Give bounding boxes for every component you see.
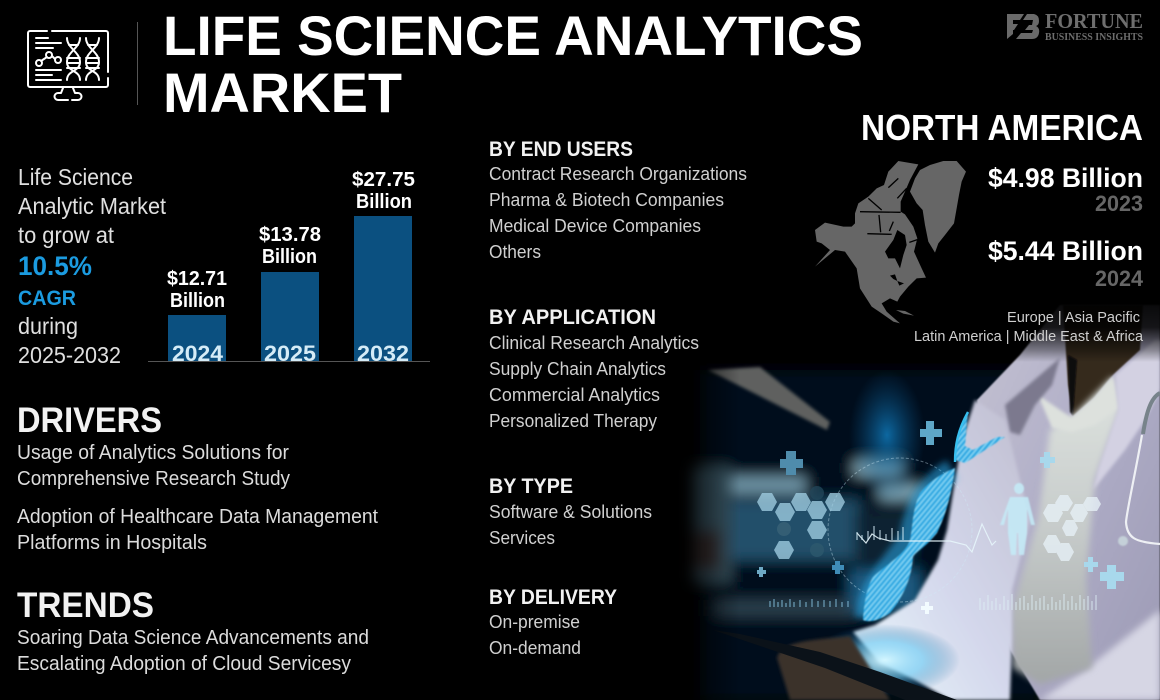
panel: trends: Soaring Data Science Advancements and: [17, 627, 369, 649]
bar chart: Billion: [262, 246, 317, 268]
fade left: [670, 285, 740, 700]
hexagons right: [1043, 495, 1101, 561]
panel: trends: TRENDS: [17, 586, 154, 625]
panel: North America stats: NORTH AMERICA: [861, 107, 1143, 148]
panel: trends: [17, 586, 369, 675]
photo: doctor with holographic DNA: [640, 285, 1160, 700]
plus marks: [757, 421, 1124, 614]
panel: by application: BY APPLICATION: [489, 306, 656, 329]
fade top: [640, 285, 1160, 362]
CAGR summary text: 2025-2032: [18, 342, 121, 368]
lower right coat highlight: [1040, 610, 1160, 700]
logo: Fortune Business Insights: FORTUNE: [1045, 9, 1143, 33]
CAGR summary text: 10.5%: [18, 251, 92, 281]
sleeve: [853, 400, 1030, 700]
panel: by delivery: On-premise: [489, 611, 580, 632]
hand: [777, 636, 890, 700]
panel: by end users: Pharma & Biotech Companies: [489, 189, 724, 210]
pulse line: [857, 524, 996, 552]
right lapel: [1093, 340, 1160, 490]
title: LIFE SCIENCE ANALYTICS: [163, 4, 863, 67]
panel: North America stats: Europe | Asia Pacific: [1007, 309, 1140, 326]
bar chart: 2032: [357, 341, 409, 366]
CAGR summary text: Analytic Market: [18, 193, 167, 219]
panel: North America stats: $5.44 Billion: [988, 236, 1143, 266]
bar chart: 2024: [172, 341, 223, 366]
panel: by delivery: BY DELIVERY: [489, 586, 617, 609]
bar chart: [148, 169, 430, 366]
logo: Fortune Business Insights: [1007, 9, 1143, 43]
panel: drivers: Usage of Analytics Solutions for: [17, 442, 289, 464]
panel: by delivery: [489, 586, 617, 658]
panel: trends: Escalating Adoption of Cloud Servicesy: [17, 653, 351, 675]
panel: drivers: Platforms in Hospitals: [17, 532, 207, 554]
icon: monitor with DNA: [28, 31, 108, 100]
panel: by application: Clinical Research Analytics: [489, 332, 699, 353]
panel: by delivery: On-demand: [489, 637, 581, 658]
tablet: [713, 630, 957, 700]
panel: North America stats: 2023: [1095, 191, 1143, 216]
panel: by type: BY TYPE: [489, 475, 573, 498]
panel: drivers: Comprehensive Research Study: [17, 468, 290, 490]
neck: [1063, 305, 1143, 416]
DNA ribbon upper: [955, 412, 1005, 463]
data bars: [980, 594, 1096, 610]
title: [163, 4, 863, 124]
panel: by type: Services: [489, 527, 555, 548]
panel: by end users: Contract Research Organizations: [489, 163, 747, 184]
CAGR summary text: CAGR: [18, 287, 76, 310]
panel: North America stats: [861, 107, 1144, 345]
human figure: [1000, 483, 1035, 555]
bar chart: Billion: [170, 290, 225, 312]
title: MARKET: [163, 61, 402, 124]
hand glow: [810, 624, 960, 696]
panel: by application: Commercial Analytics: [489, 384, 660, 405]
ceiling light: [708, 367, 830, 430]
map: North America: [815, 161, 966, 323]
bar chart: $13.78: [259, 224, 321, 246]
blurred hospital room: [690, 370, 1040, 700]
hexagons left: [757, 486, 845, 559]
panel: by application: [489, 306, 699, 431]
CAGR summary text: Life Science: [18, 164, 133, 190]
stethoscope: [1126, 435, 1160, 544]
panel: North America stats: $4.98 Billion: [988, 163, 1143, 193]
panel: North America stats: Latin America | Middle East & Africa: [914, 328, 1144, 345]
panel: by end users: BY END USERS: [489, 138, 633, 161]
bar chart: 2025: [264, 341, 316, 366]
shirt collar: [1038, 376, 1118, 432]
holo circle: [828, 458, 972, 602]
panel: by application: Personalized Therapy: [489, 410, 658, 431]
coat body: [977, 305, 1160, 700]
DNA ribbon lower: [863, 468, 955, 621]
bar chart: $27.75: [352, 169, 415, 191]
panel: by type: [489, 475, 652, 548]
panel: by type: Software & Solutions: [489, 501, 652, 522]
logo: Fortune Business Insights: BUSINESS INSIGHTS: [1045, 32, 1143, 43]
panel: by end users: Others: [489, 241, 541, 262]
panel: drivers: [17, 401, 378, 554]
panel: drivers: Adoption of Healthcare Data Management: [17, 506, 378, 528]
shirt: [1012, 376, 1120, 684]
CAGR summary text: to grow at: [18, 222, 115, 248]
panel: North America stats: 2024: [1095, 266, 1144, 291]
left lapel shadow: [1005, 358, 1060, 435]
header divider: [137, 22, 138, 105]
CAGR summary text: [18, 164, 167, 368]
panel: drivers: DRIVERS: [17, 401, 162, 440]
panel: by application: Supply Chain Analytics: [489, 358, 666, 379]
DNA glow: [866, 470, 952, 618]
bar chart: $12.71: [167, 268, 227, 290]
panel: by end users: [489, 138, 747, 262]
bar chart: Billion: [356, 191, 412, 213]
panel: by end users: Medical Device Companies: [489, 215, 701, 236]
CAGR summary text: during: [18, 313, 78, 339]
